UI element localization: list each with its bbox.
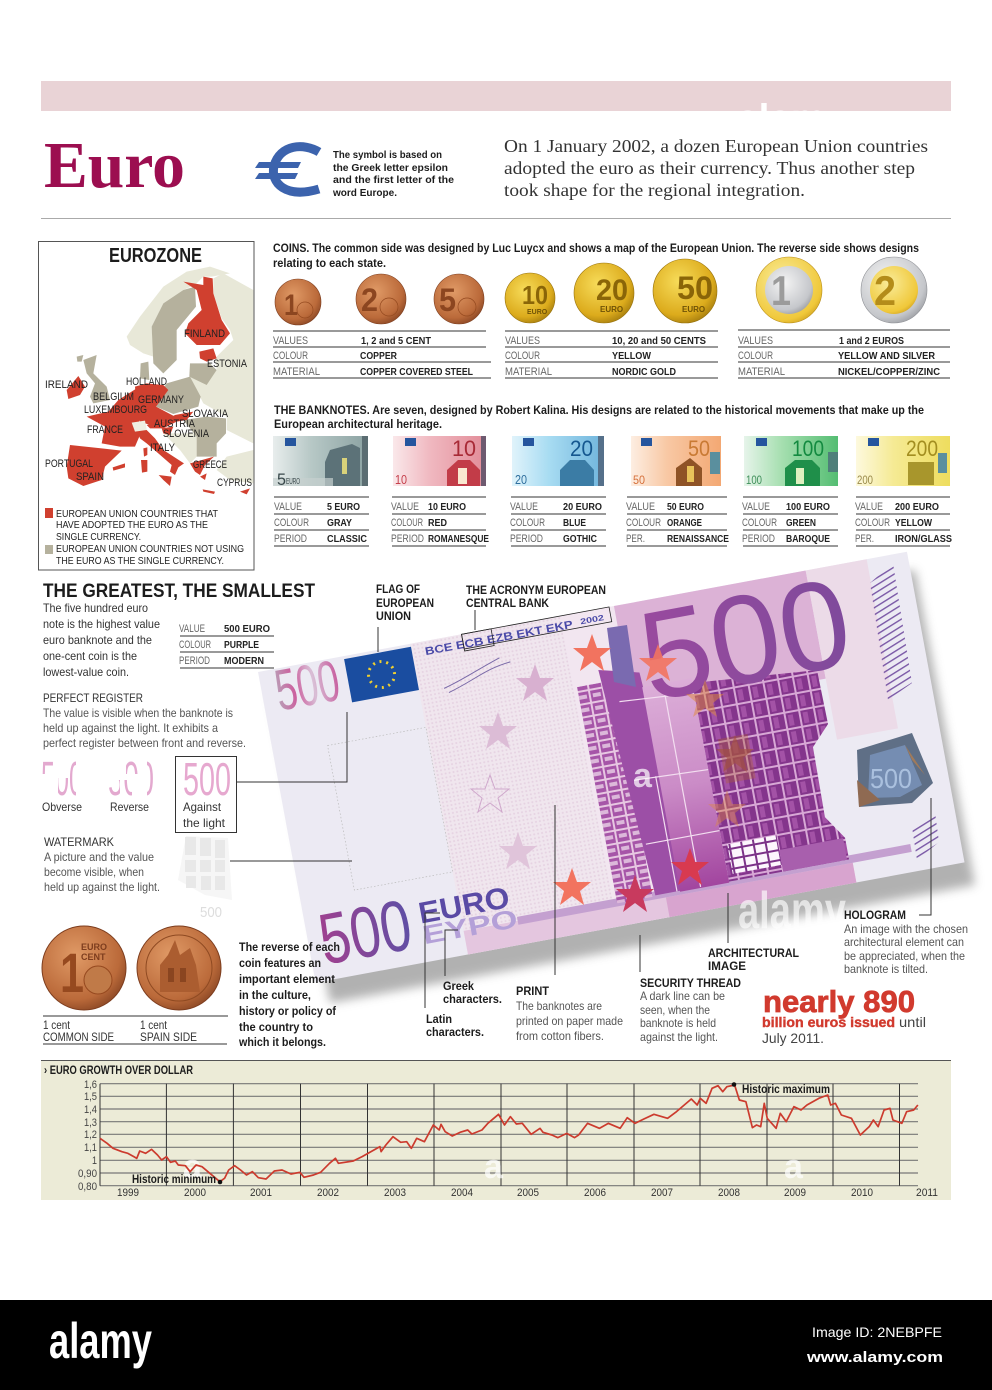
table: 10 euro: RED: [428, 517, 447, 529]
watermark letters: [183, 1148, 804, 1186]
text: 500 note intro: [43, 601, 160, 679]
banknote: 10 euro: [393, 436, 486, 487]
text: reverse of each coin: important element: [239, 972, 335, 986]
label: acronym: CENTRAL BANK: [466, 596, 549, 610]
y axis labels: 1,1: [84, 1142, 97, 1154]
y axis labels: [78, 1079, 97, 1193]
legend: [45, 508, 244, 567]
text: reverse of each coin: in the culture,: [239, 988, 311, 1002]
coin: 20 cent: 20: [596, 274, 628, 307]
icon: euro symbol: [255, 147, 319, 192]
coin captions: 1 cent: [140, 1020, 168, 1032]
x axis labels: 2006: [584, 1187, 606, 1199]
table: 500 euro: PURPLE: [224, 639, 259, 651]
coin: 20 cent: [574, 263, 634, 323]
annotation: historic maximum: Historic maximum: [742, 1084, 830, 1096]
legend: SINGLE CURRENCY.: [56, 531, 141, 543]
label: acronym: THE ACRONYM EUROPEAN: [466, 583, 606, 597]
coin: 10 cent: 10: [522, 280, 548, 310]
table: 20 euro: VALUE: [510, 501, 538, 513]
symbol note: word Europe.: [332, 187, 397, 199]
signature: [440, 656, 514, 693]
big 500: 500: [629, 551, 861, 728]
callout: nearly 890: until: [899, 1014, 926, 1030]
text: watermark: become visible, when: [44, 865, 144, 879]
symbol note: The symbol is based on: [333, 149, 442, 161]
label: security thread: [640, 935, 741, 1044]
table: 200 euro: 200 EURO: [895, 501, 939, 513]
label: print: PRINT: [516, 984, 550, 998]
table: 20 euro: GOTHIC: [563, 533, 597, 545]
grid: [100, 1084, 918, 1186]
table: 200 euro: [855, 497, 952, 546]
stars: [471, 634, 754, 912]
table: euros: [738, 330, 950, 378]
label: hologram: banknote is tilted.: [844, 962, 928, 976]
register: obverse: [42, 762, 82, 811]
panel: eurozone map: [38, 242, 254, 570]
table: cents gold: MATERIAL: [505, 366, 552, 378]
x axis labels: 1999: [117, 1187, 139, 1199]
table: 20 euro: 20 EURO: [563, 501, 602, 513]
heading: eurozone: EUROZONE: [109, 245, 202, 267]
footer: alamy bar: alamy: [49, 1313, 152, 1369]
table: 20 euro: [510, 497, 606, 546]
text: 500 note intro: note is the highest value: [43, 617, 160, 631]
table: 500 euro: VALUE: [179, 623, 205, 635]
text: perfect register: held up against the light. It exhibits a: [43, 721, 218, 735]
country labels: BELGIUM: [93, 391, 134, 403]
table: 500 euro: [179, 623, 274, 668]
table: 100 euro: [742, 497, 838, 546]
leader: watermark: [230, 860, 352, 862]
annotation: historic minimum: Historic minimum: [132, 1174, 216, 1186]
label: Greek characters: [443, 930, 502, 1006]
intro text: [504, 136, 928, 200]
coin captions: 1 cent: [43, 1020, 71, 1032]
banknote: 50 euro: [631, 436, 721, 487]
banknote: 200 euro: 200: [857, 473, 873, 487]
table: 10 euro: 10 EURO: [428, 501, 466, 513]
table: 50 euro: COLOUR: [626, 517, 661, 529]
country labels: GREECE: [193, 459, 227, 471]
coin: 5 cent: [434, 274, 484, 324]
label: hologram: An image with the chosen: [844, 922, 968, 936]
table: 500 euro: MODERN: [224, 655, 264, 667]
country labels: SLOVAKIA: [182, 408, 229, 420]
coin: 5 cent: 5: [439, 282, 456, 318]
label: security thread: against the light.: [640, 1030, 718, 1044]
label: acronym: [466, 583, 606, 630]
text: 500 note intro: lowest-value coin.: [43, 665, 129, 679]
banknotes heading: [274, 403, 924, 431]
table: 200 euro: YELLOW: [895, 517, 932, 529]
table: euros: NICKEL/COPPER/ZINC: [838, 366, 940, 378]
label: print: from cotton fibers.: [516, 1029, 604, 1043]
map of europe: [67, 267, 253, 494]
banknote: 20 euro: 20: [515, 472, 527, 487]
table: 200 euro: IRON/GLASS: [895, 533, 952, 545]
table: 50 euro: 50 EURO: [667, 501, 704, 513]
label: flag of EU: FLAG OF: [376, 582, 420, 596]
country labels: FRANCE: [87, 424, 123, 436]
country labels: SLOVENIA: [163, 428, 210, 440]
500 euro banknote: a: [633, 757, 653, 795]
banknote: 200 euro: 200: [906, 436, 938, 461]
coin: 50 cent: 50: [677, 270, 713, 306]
coin: 2 euro: [861, 257, 927, 323]
table: 5 euro: CLASSIC: [327, 533, 367, 545]
large coin: 1 cent Spain side: [137, 926, 221, 1010]
table: cents copper: COPPER: [360, 350, 397, 362]
hologram: 500: [870, 763, 912, 794]
register: against the light: [176, 753, 236, 832]
table: 100 euro: COLOUR: [742, 517, 777, 529]
banknotes heading: THE BANKNOTES. Are seven, designed by Robert Kalina. His designs are related to the historical movements that make up the: [274, 403, 924, 417]
country labels: CYPRUS: [217, 477, 252, 489]
table: 100 euro: VALUE: [742, 501, 770, 513]
table: cents gold: VALUES: [505, 335, 540, 347]
chart title: › EURO GROWTH OVER DOLLAR: [44, 1063, 193, 1077]
label: print: printed on paper made: [516, 1014, 623, 1028]
table: cents gold: NORDIC GOLD: [612, 366, 676, 378]
table: 20 euro: BLUE: [563, 517, 586, 529]
country labels: ITALY: [150, 442, 176, 454]
coin captions: SPAIN SIDE: [140, 1032, 197, 1044]
500 euro banknote: EYPO: [420, 903, 520, 950]
coin: 10 cent: EURO: [527, 309, 548, 316]
symbol note: [332, 149, 454, 199]
y axis labels: 1,4: [84, 1104, 97, 1116]
table: euros: VALUES: [738, 335, 773, 347]
banknote: 100 euro: [744, 436, 838, 487]
coins heading: [273, 241, 919, 270]
country labels: [45, 328, 252, 489]
table: cents copper: MATERIAL: [273, 366, 320, 378]
table: cents gold: [505, 331, 718, 378]
country labels: GERMANY: [138, 394, 185, 406]
table: 500 euro: 500 EURO: [224, 623, 270, 635]
footer: alamy bar: www.alamy.com: [806, 1349, 943, 1366]
small top 500: 500: [270, 648, 345, 724]
text: watermark: [44, 835, 160, 894]
coin: 1 cent: [275, 279, 321, 325]
text: perfect register: The value is visible when the banknote is: [43, 706, 233, 720]
banknote: 5 euro: EURO: [286, 477, 300, 486]
coin: 50 cent: EURO: [682, 305, 705, 314]
banknote: 100 euro: 100: [792, 436, 824, 461]
x axis labels: 2009: [784, 1187, 806, 1199]
table: 5 euro: 5 EURO: [327, 501, 360, 513]
country labels: AUSTRIA: [154, 418, 196, 430]
register: against the light: Against: [183, 800, 222, 814]
label: Latin characters: characters.: [426, 1025, 484, 1039]
coin: 2 euro: 2: [874, 267, 896, 314]
text: reverse of each coin: the country to: [239, 1020, 313, 1034]
callout: nearly 890: July 2011.: [762, 1030, 824, 1046]
watermark letters: a: [784, 1148, 804, 1186]
y axis labels: 1,3: [84, 1117, 97, 1129]
table: 10 euro: ROMANESQUE: [428, 533, 489, 545]
table: 500 euro: COLOUR: [179, 639, 211, 651]
table: 5 euro: GRAY: [327, 517, 352, 529]
text: 500 note intro: one-cent coin is the: [43, 649, 137, 663]
label: print: The banknotes are: [516, 999, 602, 1013]
label: hologram: architectural element can: [844, 935, 964, 949]
table: 200 euro: VALUE: [855, 501, 883, 513]
text: reverse of each coin: [238, 940, 340, 1049]
banknote: 5 euro: [273, 436, 368, 489]
register: obverse: 500: [41, 753, 83, 806]
watermark image: 500: [200, 904, 222, 921]
hatching: [870, 563, 912, 700]
country labels: SPAIN: [76, 471, 104, 483]
banknotes heading: European architectural heritage.: [274, 417, 442, 431]
leader: register: [237, 712, 347, 782]
x axis labels: [117, 1187, 938, 1199]
label: hologram: be appreciated, when the: [844, 949, 965, 963]
label: Greek characters: Greek: [443, 979, 474, 993]
banknote: 200 euro: [856, 436, 950, 487]
panel: euro growth chart: [41, 1060, 951, 1200]
banknote: 20 euro: [512, 436, 604, 487]
y axis labels: 1: [92, 1155, 97, 1167]
country labels: LUXEMBOURG: [84, 404, 147, 416]
footer: alamy bar: [0, 1300, 992, 1390]
banknote: 10 euro: 10: [452, 436, 476, 461]
table: 50 euro: RENAISSANCE: [667, 533, 729, 545]
footer: alamy bar: Image ID: 2NEBPFE: [812, 1324, 942, 1340]
EURO: EURO: [416, 881, 512, 930]
label: flag of EU: [376, 582, 434, 652]
symbol note: and the first letter of the: [333, 174, 454, 186]
coin: 1 euro: 1: [771, 267, 791, 314]
text: watermark: WATERMARK: [44, 835, 114, 849]
table: 10 euro: [391, 497, 489, 546]
text: perfect register: perfect register between front and reverse.: [43, 736, 246, 750]
watermark: alamy on note: alamy: [738, 882, 846, 940]
country labels: HOLLAND: [126, 376, 167, 388]
header band: [41, 81, 951, 141]
legend: THE EURO AS THE SINGLE CURRENCY.: [56, 555, 224, 567]
acronym strip: BCE ECB EZB EKT EKP: [424, 619, 574, 658]
banknote: 10 euro: 10: [395, 472, 407, 487]
x axis labels: 2008: [718, 1187, 740, 1199]
table: cents copper: 1, 2 and 5 CENT: [361, 335, 432, 347]
table: 200 euro: PER.: [855, 533, 874, 545]
large coin: 1 cent common side: CENT: [81, 952, 106, 962]
country labels: PORTUGAL: [45, 458, 93, 470]
table: 50 euro: ORANGE: [667, 517, 702, 529]
symbol note: the Greek letter epsilon: [333, 162, 448, 174]
text: reverse of each coin: The reverse of each: [239, 940, 340, 954]
header band: alamy: [737, 97, 848, 141]
country labels: ESTONIA: [207, 358, 248, 370]
dotted watermark area: [328, 727, 453, 890]
low 500: 500: [313, 885, 418, 981]
table: 5 euro: PERIOD: [274, 533, 307, 545]
label: flag of EU: EUROPEAN: [376, 596, 434, 610]
large coin: 1 cent common side: 1: [60, 941, 84, 1004]
table: 20 euro: PERIOD: [510, 533, 543, 545]
label: Greek characters: characters.: [443, 992, 502, 1006]
table: cents gold: 10, 20 and 50 CENTS: [612, 335, 706, 347]
coin: 50 cent: [653, 259, 717, 323]
hologram: [857, 733, 933, 807]
banknote: 100 euro: 100: [746, 473, 762, 487]
table: 100 euro: 100 EURO: [786, 501, 830, 513]
callout: nearly 890: [762, 984, 926, 1046]
table: 50 euro: [626, 497, 729, 546]
table: cents gold: COLOUR: [505, 350, 540, 362]
label: security thread: SECURITY THREAD: [640, 976, 741, 990]
table: 50 euro: PER.: [626, 533, 645, 545]
y axis labels: 0,80: [78, 1181, 97, 1193]
y axis labels: 1,2: [84, 1129, 97, 1141]
table: 200 euro: COLOUR: [855, 517, 890, 529]
y axis labels: 1,5: [84, 1091, 97, 1103]
table: euros: YELLOW AND SILVER: [838, 350, 935, 362]
text: 500 note intro: The five hundred euro: [43, 601, 148, 615]
register: reverse: 500: [108, 753, 154, 806]
left building column: [577, 681, 653, 903]
coin captions: COMMON SIDE: [43, 1032, 114, 1044]
register: against the light: the light: [183, 816, 226, 830]
label: security thread: seen, when the: [640, 1003, 710, 1017]
register: reverse: [109, 762, 153, 811]
watermark letters: a: [183, 1148, 203, 1186]
x axis labels: 2001: [250, 1187, 272, 1199]
intro text: took shape for the regional integration.: [504, 180, 805, 200]
x axis labels: 2010: [851, 1187, 873, 1199]
table: 10 euro: VALUE: [391, 501, 419, 513]
coins heading: COINS. The common side was designed by Luc Luycx and shows a map of the European Union. The reverse side shows designs: [273, 241, 919, 255]
legend: EUROPEAN UNION COUNTRIES NOT USING: [56, 543, 244, 555]
table: 5 euro: COLOUR: [274, 517, 309, 529]
purple bar: [607, 625, 636, 687]
label: flag of EU: UNION: [376, 609, 411, 623]
register: obverse: Obverse: [42, 800, 82, 814]
watermark image: [178, 836, 232, 921]
table: 100 euro: BAROQUE: [786, 533, 830, 545]
table: 100 euro: PERIOD: [742, 533, 775, 545]
coin: 20 cent: EURO: [600, 305, 623, 314]
coin: 2 cent: 2: [361, 282, 378, 318]
x axis labels: 2002: [317, 1187, 339, 1199]
heading: greatest smallest: THE GREATEST, THE SMALLEST: [43, 581, 315, 602]
label: print: [516, 805, 623, 1043]
banknote: 50 euro: 50: [633, 473, 645, 487]
large coin: 1 cent common side: EURO: [81, 942, 107, 952]
text: watermark: A picture and the value: [44, 850, 154, 864]
text: 500 note intro: euro banknote and the: [43, 633, 152, 647]
title: Euro: [44, 129, 185, 202]
watermark letters: a: [484, 1148, 504, 1186]
large coin: 1 cent common side: [42, 926, 126, 1010]
table: 10 euro: PERIOD: [391, 533, 424, 545]
coin: 1 cent: 1: [284, 289, 298, 322]
banknote: 5 euro: 5: [277, 470, 286, 489]
y axis labels: 1,6: [84, 1079, 97, 1091]
table: euros: 1 and 2 EUROS: [839, 335, 904, 347]
x axis labels: 2003: [384, 1187, 406, 1199]
intro text: adopted the euro as their currency. Thus another step: [504, 158, 915, 178]
table: euros: MATERIAL: [738, 366, 785, 378]
table: cents copper: [273, 331, 491, 378]
label: security thread: banknote is held: [640, 1016, 716, 1030]
banknote: 50 euro: 50: [688, 436, 710, 461]
label: architectural image: IMAGE: [708, 959, 746, 973]
table: euros: COLOUR: [738, 350, 773, 362]
text: perfect register: PERFECT REGISTER: [43, 691, 143, 705]
table: 50 euro: VALUE: [626, 501, 655, 513]
table: 500 euro: PERIOD: [179, 655, 210, 667]
table: cents copper: VALUES: [273, 335, 308, 347]
coin captions: [43, 1016, 228, 1044]
label: Latin characters: Latin: [426, 1012, 452, 1026]
text: perfect register: [43, 691, 246, 750]
table: 5 euro: [274, 497, 369, 546]
label: hologram: [844, 798, 968, 976]
label: security thread: A dark line can be: [640, 989, 725, 1003]
text: reverse of each coin: coin features an: [239, 956, 321, 970]
coin: 2 cent: [356, 274, 406, 324]
text: watermark: held up against the light.: [44, 880, 160, 894]
country labels: IRELAND: [45, 379, 88, 391]
x axis labels: 2000: [184, 1187, 206, 1199]
label: Latin characters: [425, 913, 484, 1039]
label: architectural image: ARCHITECTURAL: [708, 946, 799, 960]
coins heading: relating to each state.: [273, 256, 386, 270]
coin: 10 cent: [505, 273, 555, 323]
500 euro banknote: 2002: [579, 613, 605, 626]
label: hologram: HOLOGRAM: [844, 908, 906, 922]
text: reverse of each coin: history or policy of: [239, 1004, 337, 1018]
text: reverse of each coin: which it belongs.: [238, 1035, 326, 1049]
callout: nearly 890: billion euros issued: [762, 1014, 895, 1030]
table: cents gold: YELLOW: [612, 350, 651, 362]
callout: nearly 890: nearly 890: [763, 984, 915, 1019]
y axis labels: 0,90: [78, 1168, 97, 1180]
label: architectural image: [708, 893, 799, 973]
table: 5 euro: VALUE: [274, 501, 302, 513]
intro text: On 1 January 2002, a dozen European Union countries: [504, 136, 928, 156]
line: euro vs dollar: [100, 1085, 918, 1182]
table: 10 euro: COLOUR: [391, 517, 423, 529]
legend: HAVE ADOPTED THE EURO AS THE: [56, 519, 208, 531]
table: cents copper: COPPER COVERED STEEL: [360, 366, 473, 378]
x axis labels: 2004: [451, 1187, 473, 1199]
x axis labels: 2011: [916, 1187, 938, 1199]
legend: EUROPEAN UNION COUNTRIES THAT: [56, 508, 218, 520]
register: reverse: Reverse: [110, 800, 149, 814]
500 euro banknote: [255, 538, 975, 1003]
table: cents copper: COLOUR: [273, 350, 308, 362]
table: 100 euro: GREEN: [786, 517, 816, 529]
coin: 1 euro: [756, 257, 822, 323]
x axis labels: 2007: [651, 1187, 673, 1199]
banknote: 20 euro: 20: [570, 436, 593, 461]
country labels: FINLAND: [184, 328, 225, 340]
x axis labels: 2005: [517, 1187, 539, 1199]
flag of EU: [344, 647, 419, 702]
coin row: [275, 257, 927, 325]
table: 20 euro: COLOUR: [510, 517, 545, 529]
register: against the light: 500: [183, 753, 231, 805]
